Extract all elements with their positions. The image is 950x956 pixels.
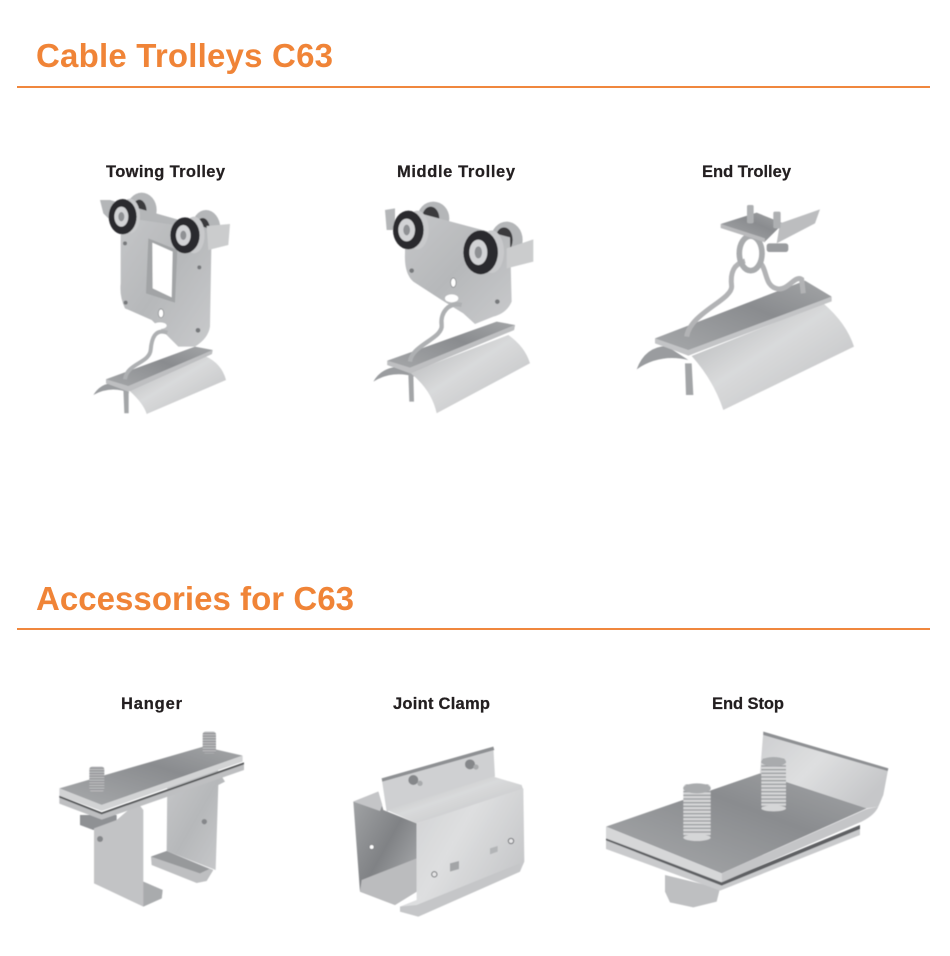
heading: Cable Trolleys C63: Cable Trolleys C63 <box>36 37 333 74</box>
panel: End Stop <box>606 695 888 907</box>
orange rule under second heading <box>17 628 930 630</box>
label: Towing Trolley: Towing Trolley <box>106 163 226 181</box>
panel: End Trolley <box>637 163 854 410</box>
illustration: end trolley <box>637 205 854 410</box>
label: Hanger: Hanger <box>121 695 183 713</box>
panel: Joint Clamp <box>353 695 524 917</box>
orange rule under first heading <box>17 86 930 88</box>
illustration: end stop <box>606 732 888 907</box>
label: Joint Clamp: Joint Clamp <box>393 695 490 713</box>
label: End Trolley: End Trolley <box>702 163 792 181</box>
illustration: middle trolley <box>373 202 533 413</box>
panel: Hanger <box>59 695 244 907</box>
illustration: hanger <box>59 732 244 907</box>
heading: Accessories for C63: Accessories for C63 <box>36 580 354 617</box>
panel: Middle Trolley <box>373 163 533 413</box>
panel: Towing Trolley <box>93 163 230 414</box>
illustration: towing trolley <box>93 193 230 414</box>
label: Middle Trolley: Middle Trolley <box>397 163 516 181</box>
label: End Stop: End Stop <box>712 695 784 713</box>
illustration: joint clamp <box>353 747 524 917</box>
